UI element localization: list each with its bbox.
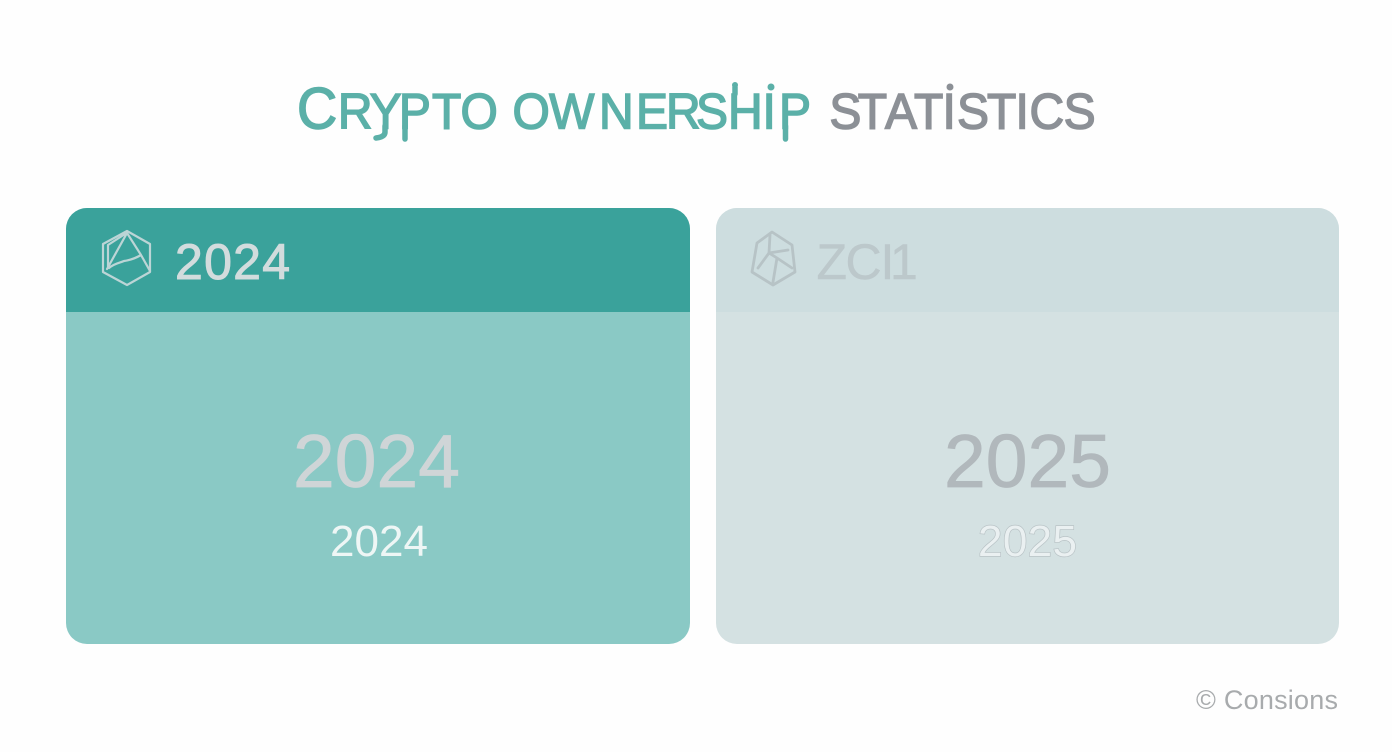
panel header: 2024 bbox=[66, 208, 690, 312]
panel header: 2025 bbox=[716, 208, 1339, 312]
panel: 2025 bbox=[716, 208, 1339, 644]
small year caption: 2024 bbox=[330, 517, 428, 566]
faded header label: ZCI1 bbox=[816, 234, 918, 290]
large year value: 2024 bbox=[293, 419, 460, 503]
title: RYPTO bbox=[338, 85, 498, 140]
header year label: 2024 bbox=[175, 234, 290, 290]
title bbox=[297, 77, 1096, 142]
icon: faded crypto hexagon bbox=[752, 232, 795, 285]
footer credit: © Consions bbox=[1196, 685, 1338, 715]
large year value: 2025 bbox=[944, 419, 1111, 503]
icon: crypto hexagon bbox=[103, 231, 150, 285]
title: STATISTICS bbox=[829, 85, 1096, 140]
title: OWNERSHIP bbox=[513, 85, 811, 140]
panel: 2024 bbox=[66, 208, 690, 644]
title: C bbox=[297, 77, 337, 142]
small year caption: 2025 bbox=[978, 517, 1077, 566]
